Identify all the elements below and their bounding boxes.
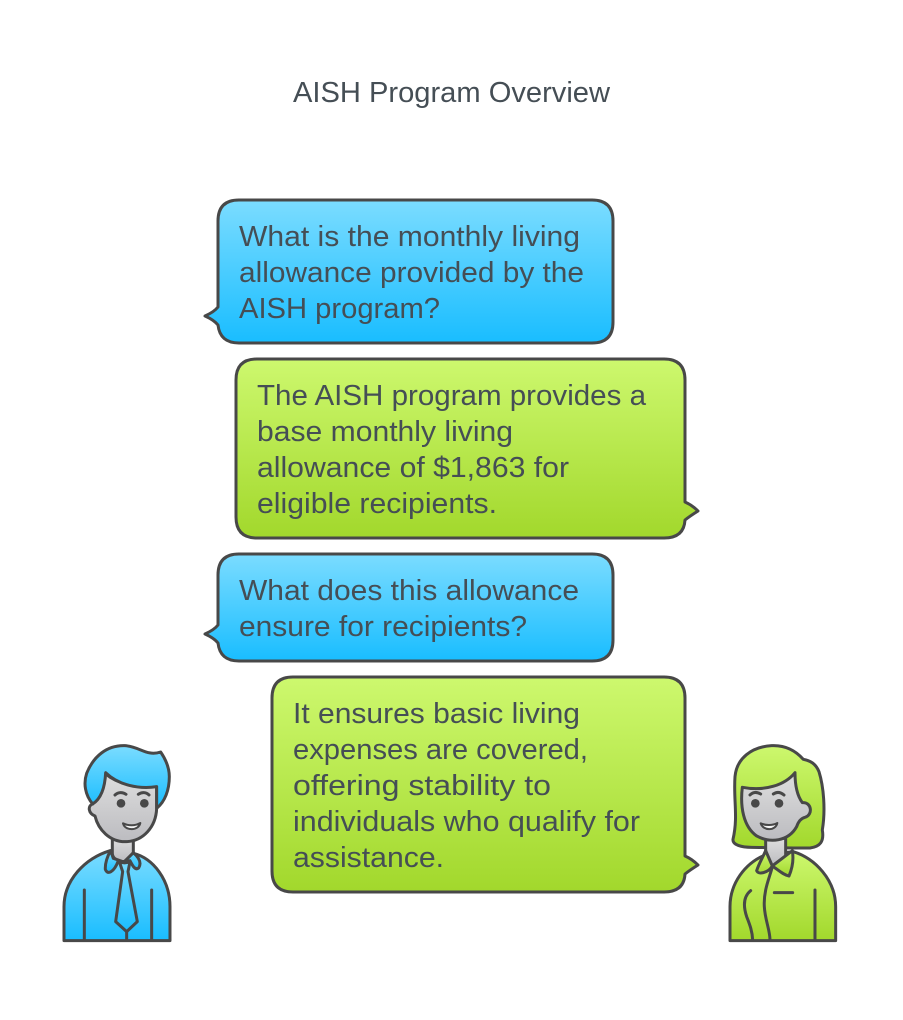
speech bubble: answer 1: allowance of $1,863 for (257, 452, 569, 484)
icon: man character (64, 746, 170, 941)
speech bubble: answer 2: individuals who qualify for (293, 806, 640, 838)
speech bubble: answer 1: The AISH program provides a (257, 380, 647, 412)
speech bubble: answer 1: base monthly living (257, 416, 513, 448)
speech bubble: answer 1: eligible recipients. (257, 488, 497, 520)
speech bubble: question 1: AISH program? (239, 293, 440, 325)
speech bubble: question 2: What does this allowance (239, 575, 579, 607)
speech bubble: answer 2: offering stability to (293, 770, 551, 802)
speech bubble: question 1: allowance provided by the (239, 257, 584, 289)
speech bubble: question 2: ensure for recipients? (239, 611, 527, 643)
title: AISH Program Overview (293, 77, 611, 109)
speech bubble: question 1 (205, 200, 613, 343)
speech bubble: answer 2 (272, 677, 698, 892)
speech bubble: answer 2: expenses are covered, (293, 734, 588, 766)
speech bubble: question 1: What is the monthly living (239, 221, 580, 253)
speech bubble: answer 2: assistance. (293, 842, 444, 874)
icon: woman character (730, 746, 836, 941)
speech bubble: answer 2: It ensures basic living (293, 698, 580, 730)
speech bubble: question 2 (205, 554, 613, 661)
speech bubble: answer 1 (236, 359, 698, 538)
